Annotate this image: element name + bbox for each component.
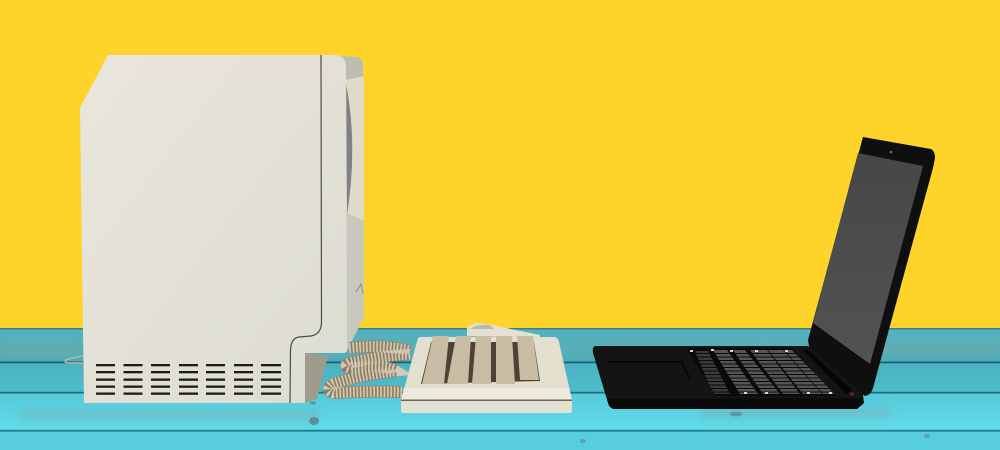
keyboard top plate — [401, 337, 572, 400]
computer front face: upper shade — [338, 56, 363, 88]
seam line — [290, 55, 322, 403]
hinge — [803, 350, 852, 394]
yellow wall background — [0, 0, 1000, 329]
webcam — [890, 151, 892, 153]
logo mark — [356, 284, 363, 294]
key highlights — [690, 349, 832, 394]
wooden table — [0, 328, 1000, 450]
laptop screen — [813, 153, 923, 364]
keyboard front bevel — [401, 388, 572, 400]
computer front face: screen side — [346, 76, 364, 222]
laptop base — [593, 346, 864, 409]
coiled keyboard cable — [329, 347, 410, 393]
keys — [690, 350, 840, 394]
key well — [421, 342, 540, 384]
keyboard base — [401, 401, 572, 413]
side panel — [80, 55, 347, 403]
vintage computer — [65, 55, 364, 403]
ventilation slots — [96, 364, 281, 395]
mouse behind keyboard — [467, 323, 540, 338]
keyboard deck — [686, 348, 836, 396]
computer front face: disc curve — [346, 84, 352, 215]
status light — [850, 392, 854, 396]
keyboard — [401, 323, 572, 413]
cable at rear — [65, 356, 83, 363]
key columns — [422, 336, 539, 384]
laptop — [593, 137, 935, 409]
laptop lid — [808, 137, 935, 396]
touchpad — [608, 361, 691, 379]
base front edge — [607, 398, 864, 409]
computer front face: lower shade — [346, 213, 364, 351]
stand underside — [304, 352, 328, 403]
